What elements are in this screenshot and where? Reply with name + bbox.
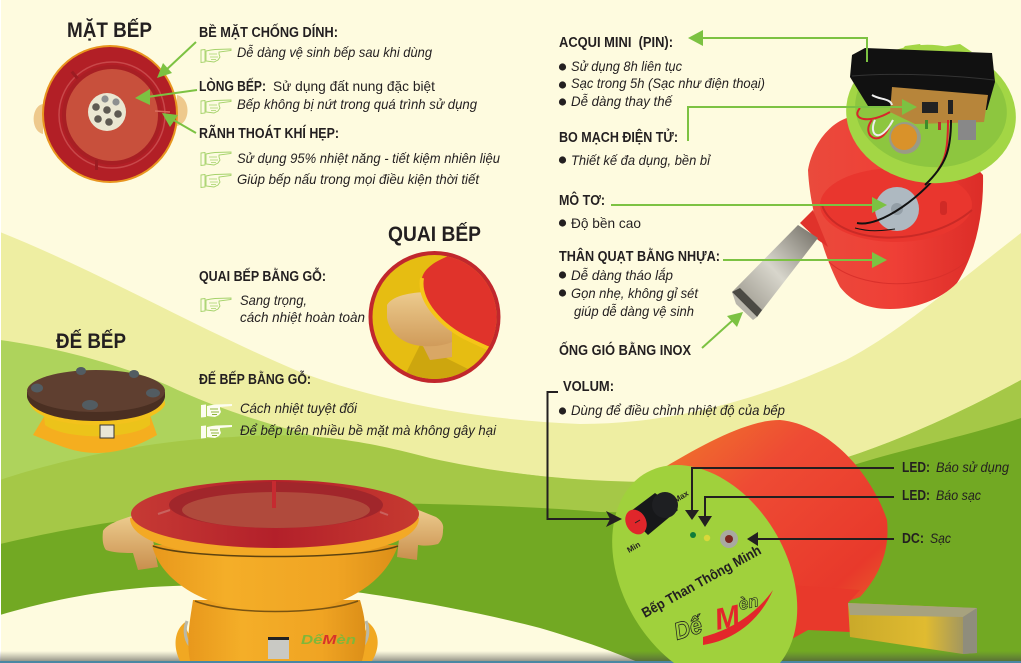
text block: thân quạt bằng nhựa: giúp dễ dàng vệ sinh — [574, 303, 694, 319]
arrow: DC — [747, 532, 894, 546]
text block: volum — [559, 379, 785, 418]
text block: thân quạt bằng nhựa: Dễ dàng tháo lắp — [571, 267, 673, 283]
text block: quai bếp bằng gỗ: QUAI BẾP BẰNG GỖ: — [199, 267, 326, 285]
text block: rãnh thoát khí hẹp: Giúp bếp nấu trong mọi điều kiện thời tiết — [237, 171, 480, 187]
text block: rãnh thoát khí hẹp: RÃNH THOÁT KHÍ HẸP: — [199, 124, 339, 142]
label: DC sạc — [902, 530, 951, 547]
logo: Dế Mèn — [671, 590, 773, 646]
text block: thân quạt bằng nhựa: Gọn nhẹ, không gỉ sét — [571, 285, 699, 301]
label: LED báo sử dụng: Báo sử dụng — [936, 459, 1009, 475]
text block: bo mạch điện tử: Thiết kế đa dụng, bền bỉ — [571, 152, 712, 168]
arrow: thân quạt — [723, 252, 887, 268]
text block: acqui mini: Sử dụng 8h liên tục — [571, 58, 682, 74]
arrow: bề mặt chống dính — [157, 42, 196, 78]
heading: MẶT BẾP: MẶT BẾP — [67, 17, 152, 42]
arrow: lòng bếp — [135, 89, 197, 105]
photo: full stove — [103, 480, 443, 661]
label: DC sạc: DC: — [902, 531, 924, 547]
text block: lòng bếp: LÒNG BẾP: — [199, 77, 266, 95]
logo: Dế Mèn: M — [712, 599, 744, 637]
text block: rãnh thoát khí hẹp: Sử dụng 95% nhiệt năng - tiết kiệm nhiên liệu — [237, 150, 500, 166]
label: LED báo sạc: LED: — [902, 488, 930, 504]
logo: Dế Mèn: èn — [737, 591, 760, 614]
photo: assembled fan: Min — [626, 540, 642, 555]
photo: open fan with circuit — [732, 36, 1021, 320]
label: DC sạc: Sạc — [930, 530, 951, 546]
text block: acqui mini: Dễ dàng thay thế — [571, 93, 673, 109]
text block: quai bếp bằng gỗ: cách nhiệt hoàn toàn — [240, 309, 365, 325]
label: LED báo sạc — [902, 487, 981, 504]
text block: bo mạch điện tử — [559, 128, 712, 168]
fan front face — [612, 465, 797, 663]
heading: ĐẾ BẾP: ĐẾ BẾP — [56, 328, 126, 353]
text block: mô tơ — [559, 191, 641, 231]
text block: đế bếp bằng gỗ: ĐẾ BẾP BẰNG GỖ: — [199, 370, 311, 388]
photo: assembled fan: Max — [672, 489, 691, 505]
arrow: rãnh thoát khí — [162, 113, 196, 133]
text block: bề mặt chống dính: Dễ dàng vệ sinh bếp sau khi dùng — [237, 44, 432, 60]
text block: acqui mini: ACQUI MINI (PIN): — [559, 35, 673, 51]
logo on stove: Dế Mèn — [301, 632, 356, 647]
photo: assembled fan — [612, 420, 977, 663]
arrow: bo mạch — [688, 99, 917, 141]
text block: thân quạt bằng nhựa — [559, 247, 720, 319]
text block: quai bếp bằng gỗ — [199, 267, 365, 325]
text block: bề mặt chống dính — [199, 23, 432, 62]
text block: đế bếp bằng gỗ — [199, 370, 497, 438]
heading: QUAI BẾP: QUAI BẾP — [388, 221, 481, 246]
label: LED báo sử dụng — [902, 459, 1009, 476]
photo: stove top view — [34, 45, 188, 183]
text block: volum: Dùng để điều chỉnh nhiệt độ của bếp — [571, 402, 785, 418]
text block: đế bếp bằng gỗ: Để bếp trên nhiều bề mặt mà không gây hại — [240, 422, 497, 438]
photo: assembled fan: Bếp Than Thông Minh — [639, 542, 764, 621]
volume knob — [621, 492, 678, 538]
text block: mô tơ: Độ bền cao — [571, 215, 641, 231]
arrow: volum — [548, 392, 622, 527]
text block: bo mạch điện tử: BO MẠCH ĐIỆN TỬ: — [559, 128, 678, 146]
text block: volum: VOLUM: — [563, 379, 614, 395]
label: LED báo sạc: Báo sạc — [936, 487, 981, 503]
text block: quai bếp bằng gỗ: Sang trọng, — [240, 292, 307, 308]
text block: mô tơ: MÔ TƠ: — [559, 191, 605, 209]
text block: rãnh thoát khí hẹp — [199, 124, 500, 188]
arrow: LED báo sử dụng — [685, 468, 894, 520]
label: LED báo sử dụng: LED: — [902, 460, 930, 476]
arrow: acqui mini — [688, 30, 867, 62]
logo: Dế Mèn: Dế — [671, 611, 708, 646]
text block: acqui mini: Sạc trong 5h (Sạc như điện thoại) — [571, 75, 765, 91]
photo: wooden base — [27, 367, 165, 453]
arrow: ống gió — [702, 312, 743, 348]
arrow: LED báo sạc — [698, 497, 894, 527]
text block: acqui mini — [559, 35, 765, 109]
text block: bề mặt chống dính: BỀ MẶT CHỐNG DÍNH: — [199, 23, 338, 41]
arrow: mô tơ — [611, 197, 887, 213]
text block: lòng bếp: Sử dụng đất nung đặc biệt — [273, 78, 435, 94]
text block: đế bếp bằng gỗ: Cách nhiệt tuyệt đối — [240, 400, 358, 416]
photo: handle close-up — [368, 251, 500, 383]
text block: lòng bếp — [199, 77, 477, 114]
text block: ống gió bằng inox: ỐNG GIÓ BẰNG INOX — [559, 341, 691, 359]
text block: lòng bếp: Bếp không bị nứt trong quá trình sử dụng — [237, 96, 477, 112]
text block: thân quạt bằng nhựa: THÂN QUẠT BẰNG NHỰA: — [559, 247, 720, 265]
